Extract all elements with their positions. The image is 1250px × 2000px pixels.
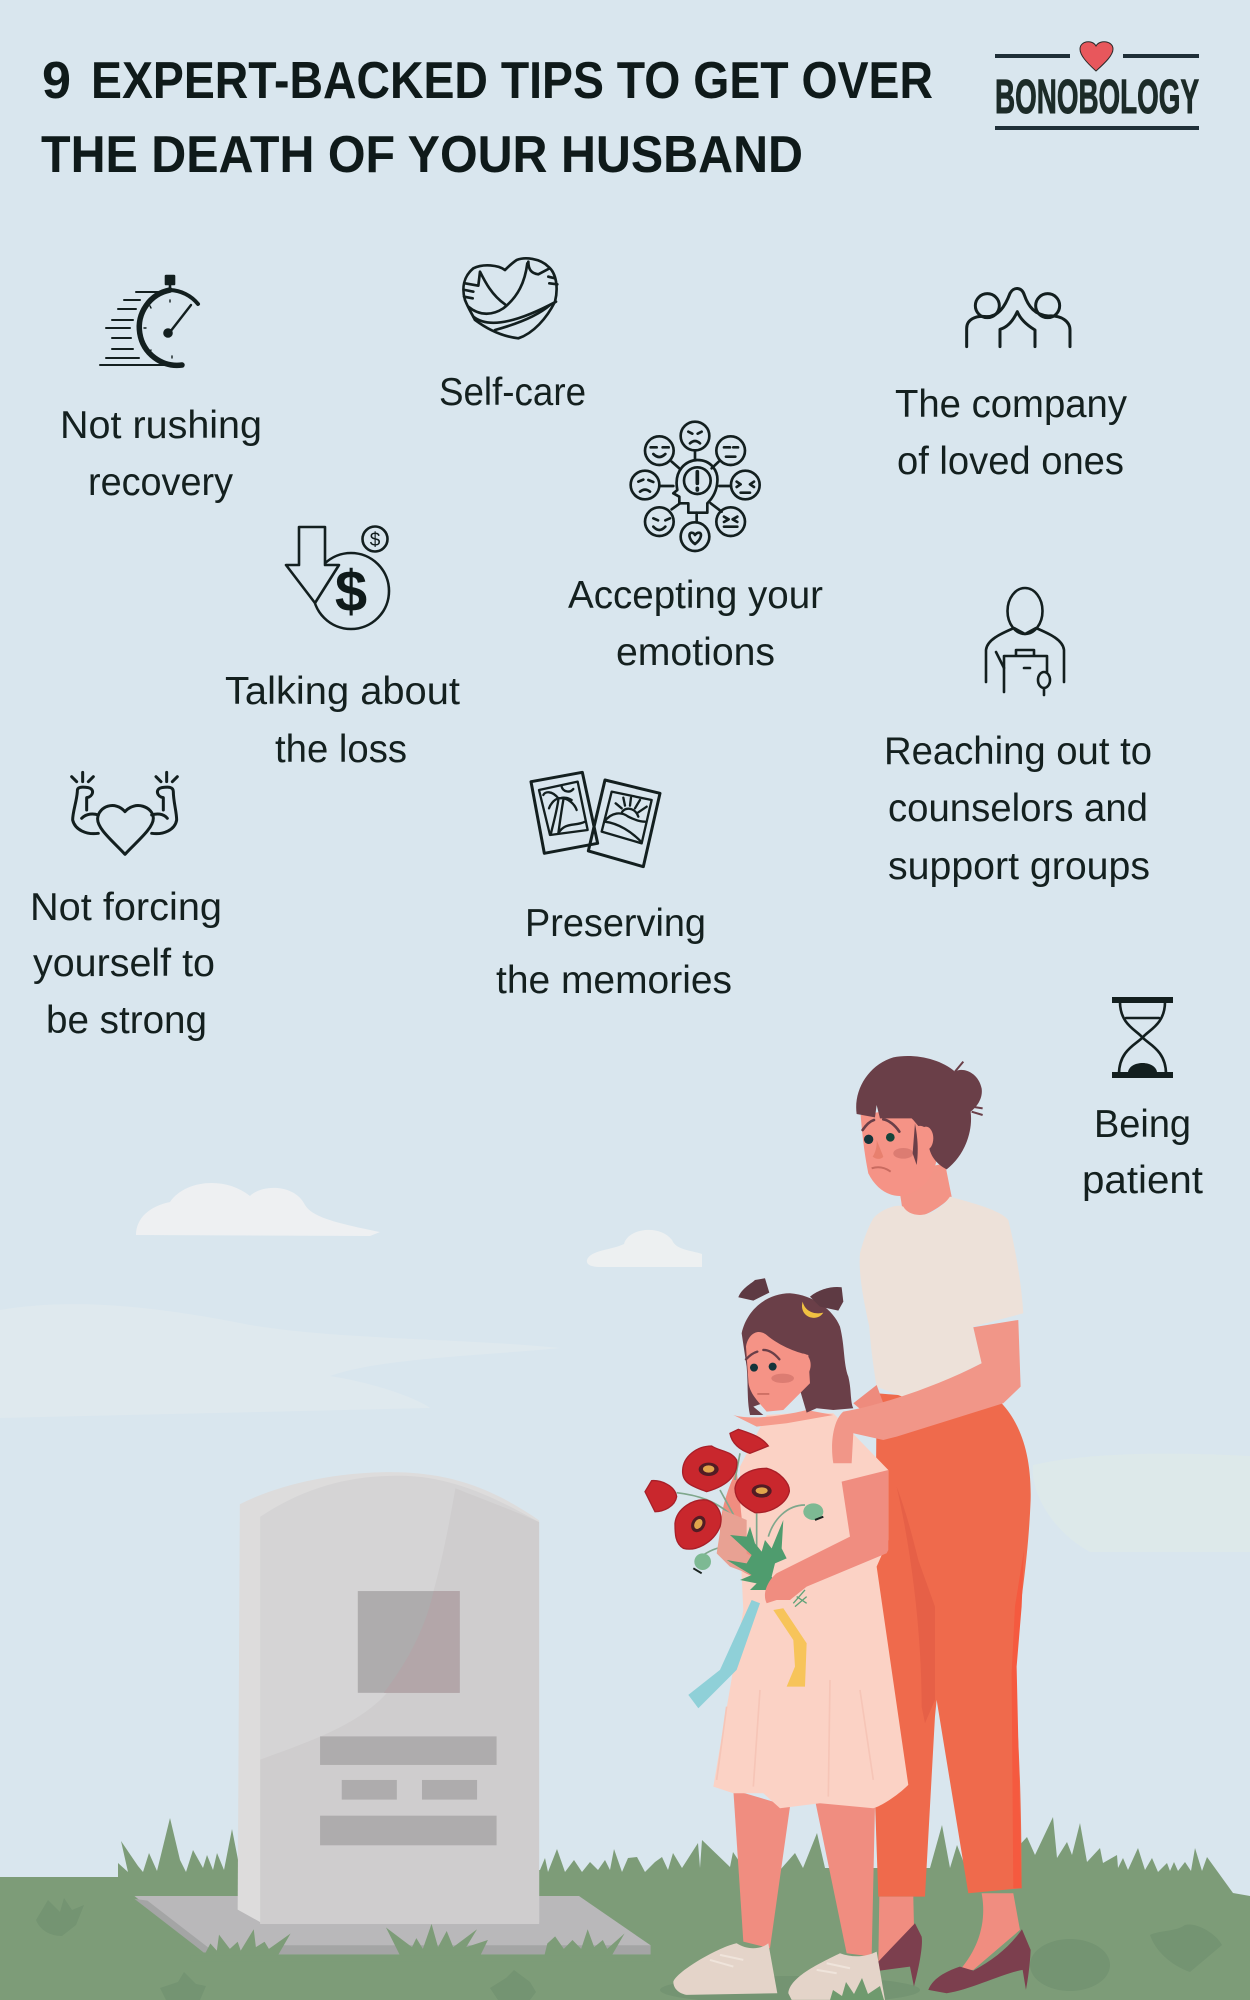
tip: the company of loved ones: The company [895,383,1127,426]
tip: not forcing yourself to be strong: be strong [46,999,207,1042]
pink wrap stems [717,1510,757,1577]
trousers [875,1393,1031,1897]
tip: talking about the loss [225,526,460,771]
inscription bars [320,1736,497,1845]
pigtails [738,1278,769,1301]
icon: stopwatch [100,276,198,365]
tip: not forcing yourself to be strong: Not forcing [30,886,222,929]
heels [878,1923,922,1987]
girl [673,1278,908,2000]
stone base [134,1896,651,1954]
hair clip [802,1302,823,1318]
icon: counselor with clipboard [986,588,1064,695]
girl's arm behind flowers [720,1470,763,1577]
icon: instant photos [531,772,660,867]
stems [677,1453,805,1555]
girl's hand and arm holding the flowers [765,1470,888,1607]
tip: preserving the memories: the memories [496,959,732,1002]
ground and grass [0,1817,1250,2000]
title: 9 [42,52,71,110]
tip: reaching out to counselors and support groups: support groups [888,845,1150,888]
neck [900,1163,952,1217]
tip: accepting your emotions [568,422,823,674]
tip: not forcing yourself to be strong: yourself to [33,942,215,985]
face [864,1135,873,1144]
tip: not rushing recovery: Not rushing [60,404,262,447]
background clouds [0,1183,1250,1552]
stone body [238,1472,539,1922]
icon: strong heart [72,772,177,854]
face [746,1332,810,1412]
sneakers [673,1943,777,1995]
tip: the company of loved ones: of loved ones [897,440,1124,483]
tip: preserving the memories [496,772,732,1002]
tip: reaching out to counselors and support groups [884,588,1152,888]
tip: reaching out to counselors and support groups: counselors and [888,787,1148,830]
icon: falling dollar: $ [370,530,381,551]
tip: talking about the loss: the loss [275,728,407,771]
logo: Bonobology [995,42,1199,130]
title: EXPERT-BACKED TIPS TO GET OVER [91,52,933,110]
tip: the company of loved ones [895,289,1127,483]
icon: high-five people [967,289,1070,347]
illustration: mother and daughter with flowers [673,1056,1031,2000]
legs [733,1790,790,1948]
title [41,52,933,184]
head [861,1107,940,1196]
tombstone [134,1472,655,1961]
leaves [727,1520,787,1590]
shirt [860,1197,1023,1398]
tip: not rushing recovery [60,276,262,504]
tip: being patient: patient [1082,1159,1203,1202]
tip: self-care: Self-care [439,371,586,414]
tip: self-care [439,258,586,414]
title: THE DEATH OF YOUR HUSBAND [41,126,803,184]
mother [856,1056,1031,1993]
mother's arm [832,1320,1021,1463]
flowers [645,1429,789,1549]
icon: hourglass [1112,997,1173,1078]
tip: not forcing yourself to be strong [30,772,222,1042]
bouquet of poppies [645,1429,823,1590]
tip: accepting your emotions: emotions [616,631,775,674]
plaque [358,1591,460,1693]
flower centres [688,1463,772,1535]
tip: accepting your emotions: Accepting your [568,574,823,617]
ground tufts [36,1898,1222,2000]
tip: not rushing recovery: recovery [88,461,233,504]
icon: emotions around a head [631,422,760,551]
grass on stone base [191,1924,655,1961]
tip: preserving the memories: Preserving [525,902,706,945]
tip: reaching out to counselors and support groups: Reaching out to [884,730,1152,773]
icon: falling dollar: $ [335,559,367,624]
ribbons [688,1600,807,1708]
buds [803,1503,823,1520]
legs [878,1897,914,1963]
icon: falling dollar [286,526,389,629]
icon: hugging heart [463,258,557,338]
tip: talking about the loss: Talking about [225,670,460,713]
hair back [742,1293,853,1415]
tip: being patient [1082,997,1203,1202]
tip: being patient: Being [1094,1103,1191,1146]
hair [856,1056,982,1169]
dress [713,1413,908,1808]
grass in front of the shoe [830,1978,884,2000]
